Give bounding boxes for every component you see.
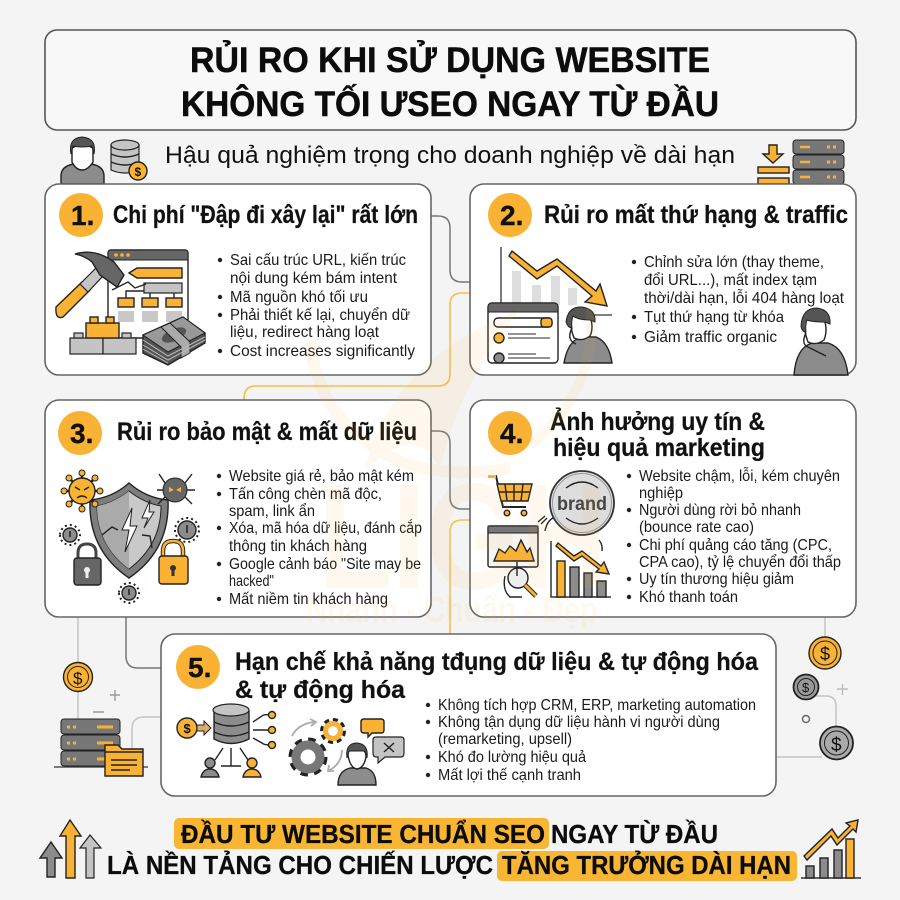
title box: KHÔNG TỐI ƯSEO NGAY TỪ ĐẦU xyxy=(181,84,719,124)
number badge 4: 4. xyxy=(500,418,523,449)
bullet list 3: Xóa, mã hóa dữ liệu, đánh cắp xyxy=(229,518,422,537)
bullet list 5: Không tích hợp CRM, ERP, marketing automation xyxy=(438,697,756,714)
heading 4 xyxy=(550,406,765,462)
bullet list 3: Google cảnh báo "Site may be xyxy=(229,556,421,573)
panel 4: reputation and marketing xyxy=(470,400,856,617)
bullet list 1: Cost increases significantly xyxy=(230,343,415,360)
number badge 3 xyxy=(58,411,102,455)
icon: download arrow, coins and servers xyxy=(758,140,844,184)
title box xyxy=(45,30,856,130)
icon: data flow, gears and user with chat bubbles: $ xyxy=(184,721,192,736)
bullet list 4: Chi phí quảng cáo tăng (CPC, xyxy=(639,537,832,554)
bullet list 3: Tấn công chèn mã độc, xyxy=(229,486,382,503)
icon: right coins: $ xyxy=(802,680,810,695)
panel 1: rebuild cost xyxy=(45,184,431,375)
icon: right coins xyxy=(794,637,853,760)
conclusion banner: ĐẦU TƯ WEBSITE CHUẨN SEO xyxy=(181,819,545,849)
conclusion banner: LÀ NỀN TẢNG CHO CHIẾN LƯỢC xyxy=(107,850,493,880)
bullet list 2: Giảm traffic organic xyxy=(644,329,777,346)
icon: cracked shield, viruses and padlocks xyxy=(60,470,199,603)
bullet list 3: hacked" xyxy=(229,573,274,590)
heading 4: hiệu quả marketing xyxy=(553,434,765,462)
heading 4: Ảnh hưởng uy tín & xyxy=(550,406,765,436)
watermark logo xyxy=(306,300,608,630)
number badge 5 xyxy=(176,645,220,689)
heading 5: Hạn chế khả năng tđụng dữ liệu & tự động hóa xyxy=(235,648,759,676)
bullet list 2: Chỉnh sửa lớn (thay theme, xyxy=(644,254,824,271)
bullet list 3 xyxy=(217,468,422,608)
icon: right coins: $ xyxy=(820,644,830,664)
bullet list 5 xyxy=(426,697,756,784)
bullet list 2 xyxy=(632,254,845,346)
number badge 2: 2. xyxy=(500,200,523,231)
bullet list 4: (bounce rate cao) xyxy=(639,519,754,536)
number badge 3: 3. xyxy=(70,418,93,449)
bullet list 1 xyxy=(218,252,415,360)
bullet list 4 xyxy=(627,466,841,606)
connectors between panels xyxy=(78,216,836,757)
icon: hammer breaking website, bricks and money xyxy=(56,250,205,365)
panel 3: security and data xyxy=(45,400,431,617)
icon: left coin, server and folder: $ xyxy=(73,669,83,688)
icon: person and database with coin xyxy=(61,137,147,184)
bullet list 4: CPA cao), tỷ lệ chuyển đổi thấp xyxy=(639,553,841,571)
icon: falling chart, search browser and sad person xyxy=(488,247,848,375)
bullet list 4: nghiệp xyxy=(639,485,683,502)
bullet list 4: Người dùng rời bỏ nhanh xyxy=(639,502,801,519)
heading 3: Rủi ro bảo mật & mất dữ liệu xyxy=(117,418,417,446)
bullet list 3: Mất niềm tin khách hàng xyxy=(229,591,388,608)
bullet list 4: Uy tín thương hiệu giảm xyxy=(639,571,794,588)
number badge 1 xyxy=(59,193,103,237)
bullet list 3: spam, link ẩn xyxy=(229,502,315,520)
panel 5: data and automation xyxy=(161,634,776,796)
heading 5: & tự động hóa xyxy=(235,676,406,704)
conclusion banner: TĂNG TRƯỞNG DÀI HẠN xyxy=(502,849,791,880)
number badge 5: 5. xyxy=(188,652,211,683)
bullet list 3: thông tin khách hàng xyxy=(229,538,367,555)
icon: cart, brand seal, browser chart and falling bars: brand xyxy=(557,494,607,515)
number badge 2 xyxy=(488,193,532,237)
bullet list 5: Mất lợi thế cạnh tranh xyxy=(438,767,581,784)
bullet list 2: Tụt thứ hạng từ khóa xyxy=(644,309,784,326)
icon: data flow, gears and user with chat bubbles xyxy=(177,704,404,785)
bullet list 5: Không tận dụng dữ liệu hành vi người dùng xyxy=(438,714,720,731)
heading 1: Chi phí "Đập đi xây lại" rất lớn xyxy=(113,201,418,229)
heading 2: Rủi ro mất thứ hạng & traffic xyxy=(544,201,848,229)
conclusion banner: NGAY TỪ ĐẦU xyxy=(551,819,718,849)
bullet list 3: Website giá rẻ, bảo mật kém xyxy=(229,468,414,485)
bullet list 1: Phải thiết kế lại, chuyển dữ xyxy=(230,306,410,324)
bullet list 1: nội dung kém bám intent xyxy=(230,270,398,287)
panel 2: ranking and traffic xyxy=(470,184,856,375)
bullet list 5: (remarketing, upsell) xyxy=(438,731,572,748)
bullet list 4: Khó thanh toán xyxy=(639,589,738,606)
bullet list 1: Mã nguồn khó tối ưu xyxy=(230,289,368,306)
conclusion banner xyxy=(107,818,797,881)
number badge 4 xyxy=(488,411,532,455)
icon: three up arrows xyxy=(40,820,101,878)
icon: cart, brand seal, browser chart and falling bars xyxy=(488,471,614,597)
icon: person and database with coin: $ xyxy=(134,165,142,179)
icon: growth chart xyxy=(801,820,861,878)
title box: RỦI RO KHI SỬ DỤNG WEBSITE xyxy=(190,40,710,80)
bullet list 2: đổi URL...), mất index tạm xyxy=(644,271,817,289)
bullet list 1: Sai cấu trúc URL, kiến trúc xyxy=(230,252,406,269)
bullet list 5: Khó đo lường hiệu quả xyxy=(438,749,586,766)
bullet list 4: Website chậm, lỗi, kém chuyên xyxy=(639,466,840,485)
subtitle: Hậu quả nghiệm trọng cho doanh nghiệp về dài hạn xyxy=(165,142,735,169)
icon: left coin, server and folder xyxy=(54,662,148,776)
watermark logo: Nhanh - Chuẩn - Đẹp xyxy=(306,589,598,630)
watermark logo: LIGH xyxy=(318,452,608,620)
number badge 1: 1. xyxy=(71,200,94,231)
bullet list 2: thời/dài hạn, lỗi 404 hàng loạt xyxy=(644,288,845,307)
bullet list 1: liệu, redirect hàng loạt xyxy=(230,324,380,341)
heading 5 xyxy=(235,648,759,704)
icon: right coins: $ xyxy=(831,735,842,756)
